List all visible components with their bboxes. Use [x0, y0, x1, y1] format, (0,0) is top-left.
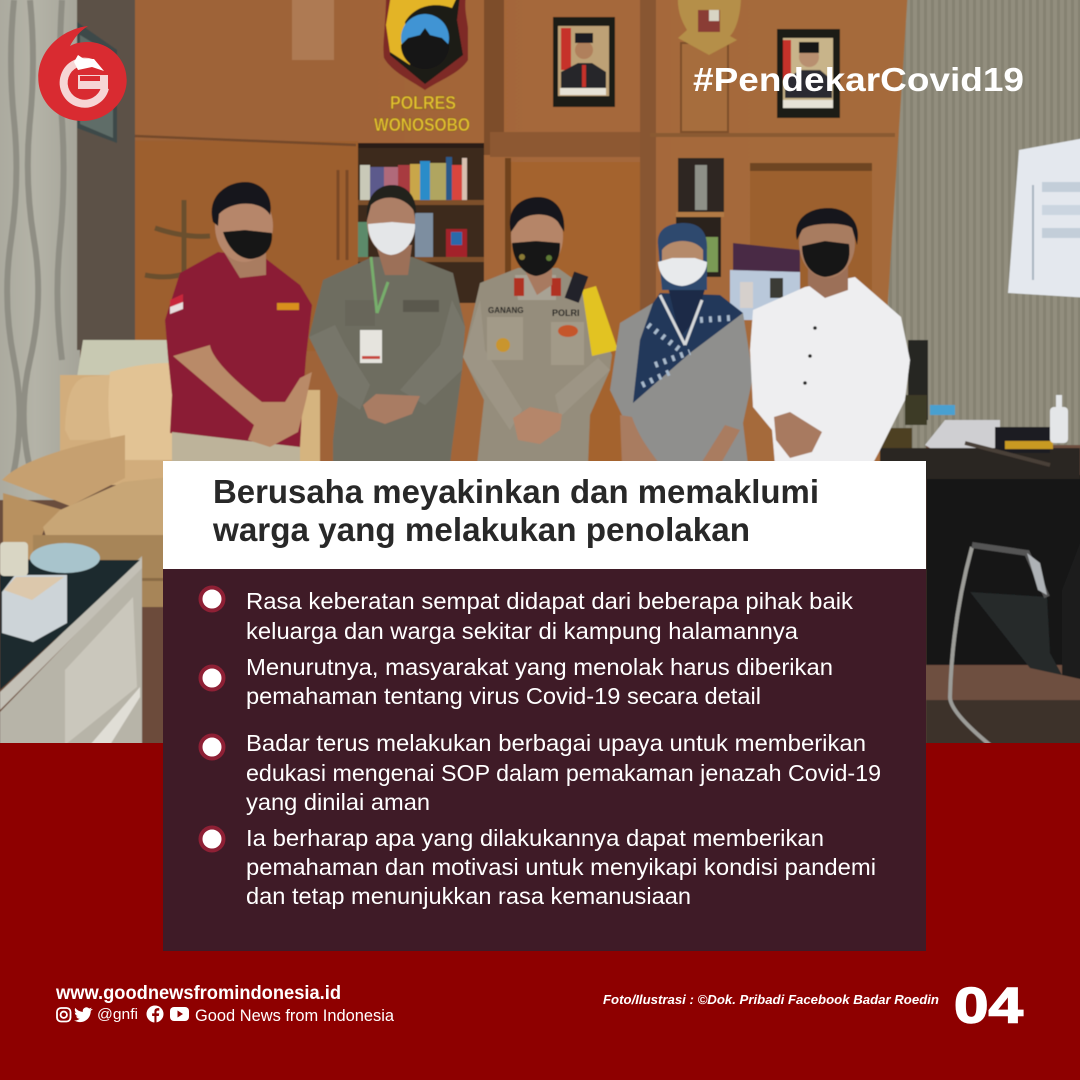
icon: youtube — [170, 1007, 189, 1021]
panel: bullet list — [163, 569, 926, 951]
bullet 2: Menurutnya, masyarakat yang menolak harus diberikan — [246, 654, 833, 680]
photo credit: Foto/Ilustrasi : ©Dok. Pribadi Facebook Badar Roedin — [603, 992, 939, 1007]
person: police officer — [463, 197, 618, 465]
bullet 1 — [200, 588, 854, 644]
person: police officer: GANANG — [488, 306, 524, 315]
photo base — [0, 350, 927, 743]
person: police officer: POLRI — [552, 308, 580, 318]
icon: instagram — [57, 1008, 70, 1022]
wall sign: Polres Wonosobo: WONOSOBO — [374, 115, 470, 135]
panel: heading — [163, 461, 926, 569]
bullet 3: Badar terus melakukan berbagai upaya untuk memberikan — [246, 730, 866, 756]
sofa — [2, 340, 320, 607]
person: man in red polo — [165, 182, 312, 465]
social name: Good News from Indonesia — [195, 1006, 395, 1025]
bullet 3: edukasi mengenai SOP dalam pemakaman jenazah Covid-19 — [246, 760, 881, 786]
person: woman in hijab — [610, 223, 753, 465]
poster behind woman — [730, 243, 800, 320]
bullet 4: pemahaman dan motivasi untuk menyikapi kondisi pandemi — [246, 854, 876, 880]
wall: curtain and dark panel — [0, 0, 139, 500]
wall sign: Polres Wonosobo — [374, 96, 470, 132]
portrait: vice president — [777, 29, 840, 118]
photo: office group portrait — [0, 0, 1080, 760]
national emblem: Garuda — [678, 0, 741, 55]
hashtag: #PendekarCovid19 — [693, 61, 1024, 98]
bullet 2: pemahaman tentang virus Covid-19 secara detail — [246, 683, 761, 709]
bookcase — [358, 143, 484, 303]
heading text: Berusaha meyakinkan dan memaklumi — [213, 473, 819, 510]
bullet 4: dan tetap menunjukkan rasa kemanusiaan — [246, 883, 691, 909]
icon: twitter — [74, 1007, 93, 1022]
person: man in grey field shirt — [309, 185, 465, 465]
floor left — [0, 607, 170, 747]
heading text: warga yang melakukan penolakan — [212, 511, 750, 548]
red bottom band — [0, 743, 1080, 1080]
social handle: @gnfi — [97, 1006, 138, 1023]
heading text — [212, 473, 819, 548]
logo: GNFI red badge — [38, 26, 127, 121]
wall: wood paneling — [135, 0, 925, 480]
page number: 04 — [954, 978, 1023, 1034]
bullet 4: Ia berharap apa yang dilakukannya dapat memberikan — [246, 825, 824, 851]
portrait: president — [553, 17, 615, 107]
wall sign: Polres Wonosobo: POLRES — [390, 93, 456, 113]
bullet 3: yang dinilai aman — [246, 789, 430, 815]
right wall and org chart — [880, 0, 1080, 460]
desk and chair — [880, 445, 1080, 750]
bullet 3 — [200, 730, 881, 815]
bullet 1: keluarga dan warga sekitar di kampung halamannya — [246, 618, 798, 644]
bullet 2 — [200, 654, 833, 709]
icon: facebook — [146, 1006, 164, 1022]
person: man in white shirt — [750, 208, 910, 465]
bullet 4 — [200, 825, 876, 909]
website url: www.goodnewsfromindonesia.id — [55, 983, 341, 1004]
desk items — [880, 340, 1068, 465]
coat rack — [145, 200, 210, 290]
coffee table — [0, 542, 142, 747]
bullet 1: Rasa keberatan sempat didapat dari beberapa pihak baik — [246, 588, 854, 614]
police shield emblem — [383, 0, 468, 90]
